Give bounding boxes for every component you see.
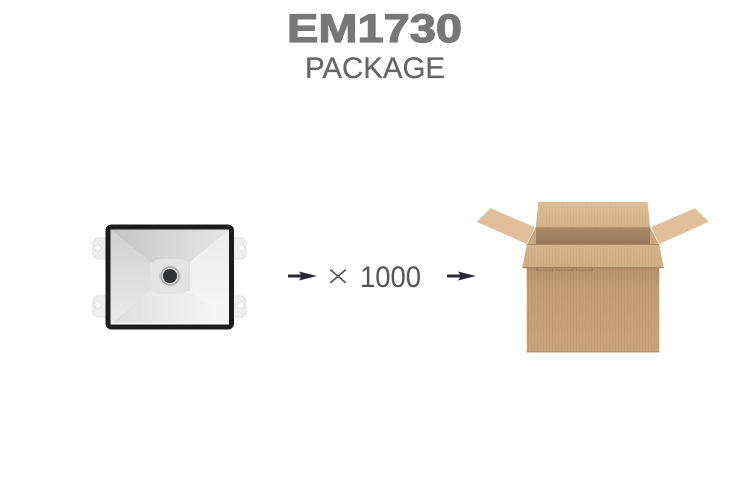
left flap <box>477 208 535 244</box>
reflector cavity <box>110 230 229 324</box>
heading: EM1730: EM1730 <box>287 7 462 51</box>
box body <box>527 268 659 352</box>
back flap <box>536 202 650 228</box>
icon: open cardboard box <box>477 202 709 352</box>
front flap <box>522 244 664 268</box>
lens <box>159 265 181 287</box>
quantity label: 1000 <box>360 261 421 294</box>
icon: EM1730 scanner module <box>93 224 246 330</box>
title <box>287 7 462 85</box>
arrow: scanner to quantity <box>288 272 317 280</box>
arrow: quantity to carton <box>447 272 476 280</box>
quantity label: × <box>326 257 350 296</box>
mounting tabs <box>93 238 246 317</box>
quantity label <box>326 257 421 296</box>
lens housing <box>153 259 188 294</box>
box interior <box>527 227 659 245</box>
black outer frame <box>106 224 234 330</box>
reflector faces <box>110 230 229 324</box>
subheading: PACKAGE: PACKAGE <box>305 52 445 85</box>
right flap <box>651 208 709 244</box>
flap tabs <box>537 268 592 270</box>
